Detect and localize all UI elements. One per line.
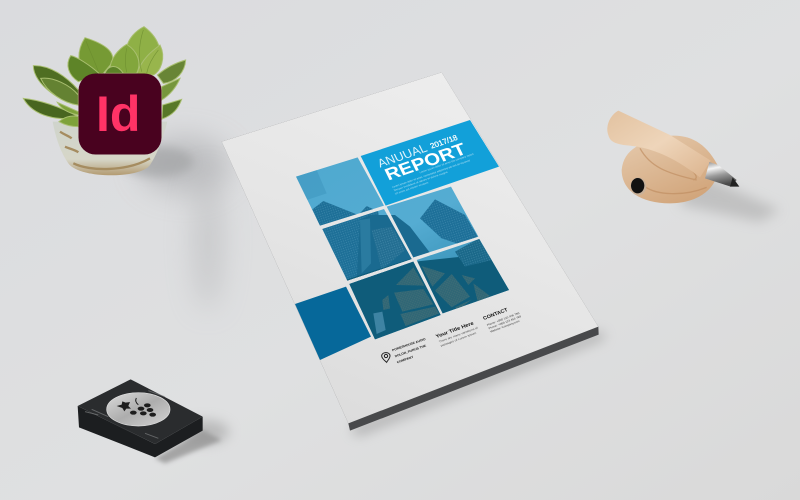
footer title text: Your Title Here bbox=[435, 321, 475, 340]
booklet thickness bbox=[222, 72, 599, 431]
central tower bbox=[355, 215, 432, 310]
pot shadow bbox=[120, 147, 193, 177]
metal disc bbox=[107, 393, 170, 426]
cover title text: REPORT bbox=[381, 139, 470, 184]
footer address text: COMPANY bbox=[396, 355, 415, 364]
block top bbox=[78, 379, 203, 444]
footer title text: There are many variations of bbox=[438, 326, 479, 344]
footer address text bbox=[391, 337, 427, 364]
base hole bbox=[630, 177, 646, 195]
block shadow bbox=[155, 430, 222, 463]
cover title text: 2017/18 bbox=[429, 133, 459, 150]
lattice panes bbox=[373, 266, 490, 334]
booklet cover page bbox=[222, 72, 598, 423]
icon: leaf and grapes bbox=[117, 398, 156, 417]
dark lower structure bbox=[345, 257, 445, 342]
cover title text bbox=[375, 133, 475, 196]
left tower bbox=[312, 201, 383, 284]
icon: InDesign app logo bbox=[78, 74, 162, 154]
footer address text: DOLOR, PURUS THE bbox=[394, 344, 427, 358]
plant in pot bbox=[23, 27, 193, 177]
report booklet bbox=[222, 72, 599, 431]
footer contact text bbox=[482, 307, 522, 334]
footer contact text: Phone: +000 123 456 789 bbox=[488, 314, 522, 330]
marble block with metal badge bbox=[78, 379, 222, 463]
leaf veins bbox=[86, 30, 158, 73]
right tower bbox=[420, 199, 478, 245]
pencil wood body bbox=[607, 111, 711, 177]
leaves bbox=[23, 27, 186, 127]
wood base bbox=[622, 136, 718, 203]
cover title text: Lorem ipsum dolor sit amet the company report bbox=[419, 153, 475, 174]
footer title text bbox=[435, 321, 479, 348]
block sides bbox=[78, 406, 203, 457]
footer title text: passages of Lorem Ipsum bbox=[440, 331, 478, 348]
footer contact text: Website: Company.com bbox=[489, 319, 521, 334]
mid right tower band bbox=[455, 238, 492, 267]
icon: InDesign app logo: Id bbox=[96, 86, 140, 142]
footer address text: POWERHOUSE AUDIO bbox=[391, 337, 427, 352]
marble veins bbox=[85, 391, 165, 438]
photo grid of skyscrapers bbox=[296, 158, 509, 340]
footer contact text: Phone: +000 123 456 789 bbox=[486, 311, 521, 327]
icon: location pin bbox=[382, 353, 390, 362]
cover title text: Tempor incididunt ut labore et dolore magna bbox=[393, 171, 449, 192]
dark blue square bbox=[295, 287, 371, 360]
pencil graphite tip bbox=[730, 177, 739, 187]
pencil metal ferrule bbox=[705, 162, 737, 187]
title bar bbox=[361, 120, 499, 206]
cover title text: Lorem ipsum dolor sit amet, consectetur adipiscing elit sed do eiusmod bbox=[392, 159, 471, 189]
cover title text: Ut enim ad minim veniam bbox=[394, 181, 429, 196]
soft shadows cast on the surface bbox=[140, 137, 780, 444]
base grain bbox=[640, 148, 707, 194]
pot bbox=[53, 122, 167, 175]
footer contact text: CONTACT bbox=[482, 307, 510, 322]
cover title text: ANUUAL bbox=[375, 141, 430, 170]
wooden pencil holder bbox=[607, 111, 739, 203]
